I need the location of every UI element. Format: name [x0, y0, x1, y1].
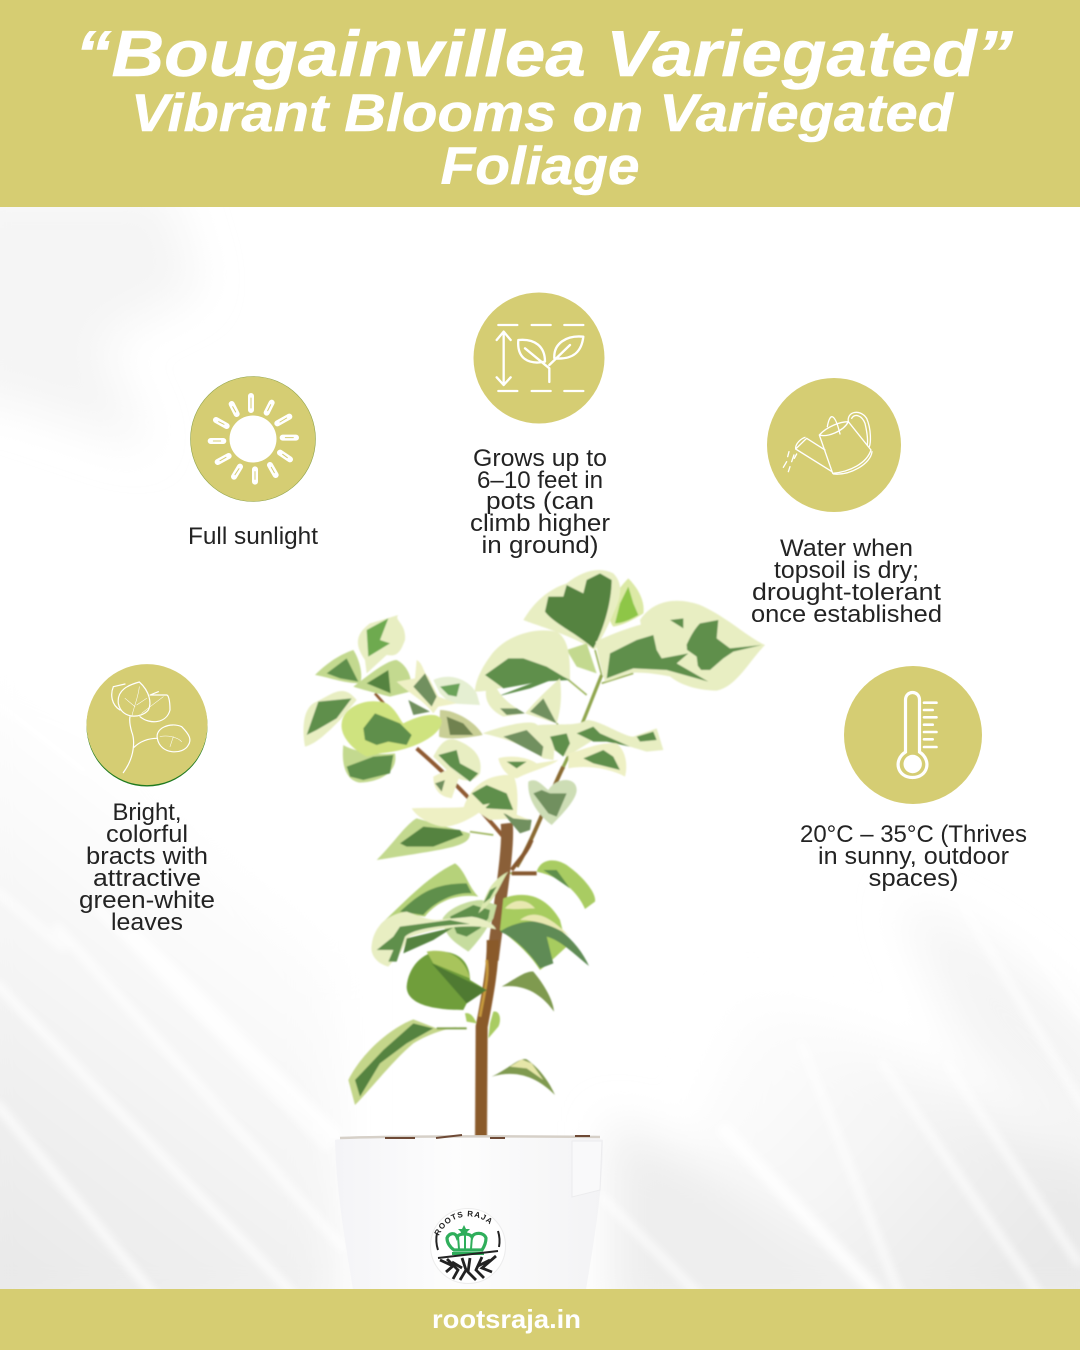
top-left leaf	[358, 615, 405, 673]
center lower cream leaf	[463, 775, 517, 820]
text: foliage	[79, 799, 215, 936]
cluster left leaves	[304, 691, 357, 747]
text: height: pots (can	[486, 488, 594, 515]
label: Roots Raja logo	[430, 1208, 506, 1284]
text: temperature: 20°C – 35°C (Thrives	[800, 821, 1027, 848]
small cream leaf	[498, 757, 558, 778]
upper small cream leaf	[478, 872, 508, 913]
icon: height plant	[474, 292, 604, 424]
feature: watering	[751, 378, 942, 628]
small right leaves	[502, 971, 554, 1012]
round green leaf	[407, 952, 487, 1010]
label: Roots Raja logo: ROOTS RAJA	[434, 1210, 492, 1236]
side leaf right	[537, 860, 595, 909]
long lower-left leaf	[348, 1019, 467, 1105]
front cream leaf	[371, 912, 496, 967]
text: foliage: bracts with	[86, 843, 208, 870]
text: height: 6–10 feet in	[477, 467, 603, 494]
text: foliage: colorful	[106, 821, 188, 848]
lower stem	[481, 940, 493, 1140]
front right leaf	[596, 621, 712, 685]
text: watering: topsoil is dry;	[774, 557, 919, 584]
back centre leaf	[443, 900, 497, 952]
light green young leaf	[609, 578, 644, 627]
mid lower leaf	[377, 818, 470, 860]
text: foliage: green-white	[79, 887, 215, 914]
title	[75, 17, 1014, 196]
title: Foliage	[440, 137, 640, 196]
title: Vibrant Blooms on Variegated	[131, 84, 955, 143]
text: watering: Water when	[780, 535, 913, 562]
text: full sunlight: Full sunlight	[188, 523, 318, 550]
text: height: in ground)	[482, 532, 598, 559]
central horizontal leaf	[483, 722, 554, 760]
small green bud leaf	[503, 813, 532, 833]
icon: leaf sprig	[86, 664, 208, 786]
text: watering: drought-tolerant	[752, 579, 941, 606]
far-right mid leaf	[538, 720, 663, 757]
text: height: climb higher	[470, 510, 610, 537]
feature: temperature	[800, 666, 1027, 892]
top-left green leaf	[380, 863, 478, 925]
heart leaf	[528, 780, 577, 825]
plant foliage and stems	[304, 570, 765, 1140]
text: temperature	[800, 821, 1027, 892]
soil rim	[340, 1136, 600, 1138]
icon: sun	[190, 376, 316, 502]
feature: foliage	[79, 664, 215, 936]
small leaf under top	[567, 643, 597, 673]
footer band	[0, 1289, 1080, 1350]
header band	[0, 0, 1080, 207]
bright yellow-green leaf	[342, 701, 442, 757]
text: foliage: attractive	[93, 865, 201, 892]
title: “Bougainvillea Variegated”	[75, 17, 1014, 90]
feature: height	[470, 292, 610, 559]
text: foliage: leaves	[111, 909, 183, 936]
icon: thermometer	[844, 666, 982, 804]
center folded leaf	[486, 678, 561, 723]
top dark leaf	[523, 570, 620, 650]
text: foliage: Bright,	[112, 799, 182, 826]
text: watering: once established	[751, 601, 942, 628]
pot	[335, 1134, 602, 1289]
text: temperature: spaces)	[868, 865, 958, 892]
left large cream leaf	[497, 677, 560, 697]
feature: full sunlight	[188, 376, 318, 550]
right long leaf	[640, 601, 765, 691]
lower-left rounded leaf	[343, 745, 395, 783]
leaf behind left	[439, 710, 483, 738]
icon: watering can	[767, 378, 901, 512]
text: watering	[751, 535, 942, 628]
text: height	[470, 445, 610, 559]
text: height: Grows up to	[473, 445, 607, 472]
lower right cream leaf	[568, 743, 626, 777]
twig	[512, 840, 537, 873]
speckled leaf	[433, 677, 480, 705]
branches	[417, 748, 503, 837]
text: temperature: in sunny, outdoor	[818, 843, 1009, 870]
right lower leaves	[500, 895, 567, 970]
pot tag	[572, 1141, 602, 1197]
footer url: rootsraja.in	[432, 1304, 581, 1334]
